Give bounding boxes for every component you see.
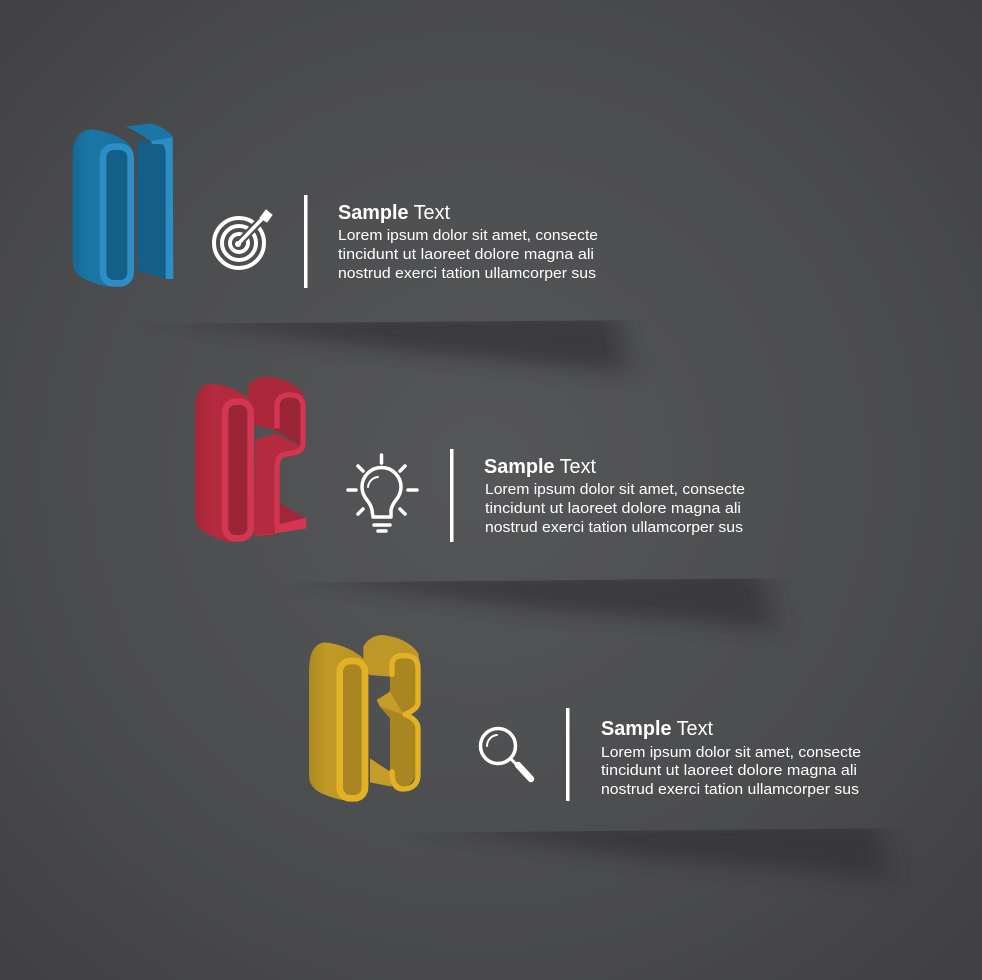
text block 3: Sample Text	[601, 718, 713, 740]
text block 3: nostrud exerci tation ullamcorper sus	[601, 781, 859, 798]
text block 2: Sample Text	[484, 456, 596, 478]
panel shadow 1	[214, 320, 631, 374]
text block 1	[338, 202, 598, 282]
text block 1: Sample Text	[338, 202, 450, 224]
icon: magnifying glass	[480, 728, 531, 779]
text block 2: Lorem ipsum dolor sit amet, consecte	[485, 481, 745, 498]
text block 3	[601, 718, 861, 798]
text block 1: nostrud exerci tation ullamcorper sus	[338, 265, 596, 282]
text block 2: tincidunt ut laoreet dolore magna ali	[485, 500, 741, 517]
number 03	[309, 635, 420, 801]
panel shadow 2	[342, 578, 776, 630]
icon: target with dart	[214, 210, 272, 268]
divider 3	[566, 708, 570, 801]
icon: light bulb	[348, 455, 417, 531]
panel shadow 3	[474, 828, 886, 877]
text block 3: Lorem ipsum dolor sit amet, consecte	[601, 744, 861, 761]
text block 1: Lorem ipsum dolor sit amet, consecte	[338, 227, 598, 244]
text block 1: tincidunt ut laoreet dolore magna ali	[338, 246, 594, 263]
text block 2: nostrud exerci tation ullamcorper sus	[485, 519, 743, 536]
divider 2	[450, 449, 454, 542]
divider 1	[304, 195, 308, 288]
text block 3: tincidunt ut laoreet dolore magna ali	[601, 762, 857, 779]
number 01	[73, 123, 173, 287]
text block 2	[484, 456, 745, 536]
number 02	[195, 377, 307, 542]
